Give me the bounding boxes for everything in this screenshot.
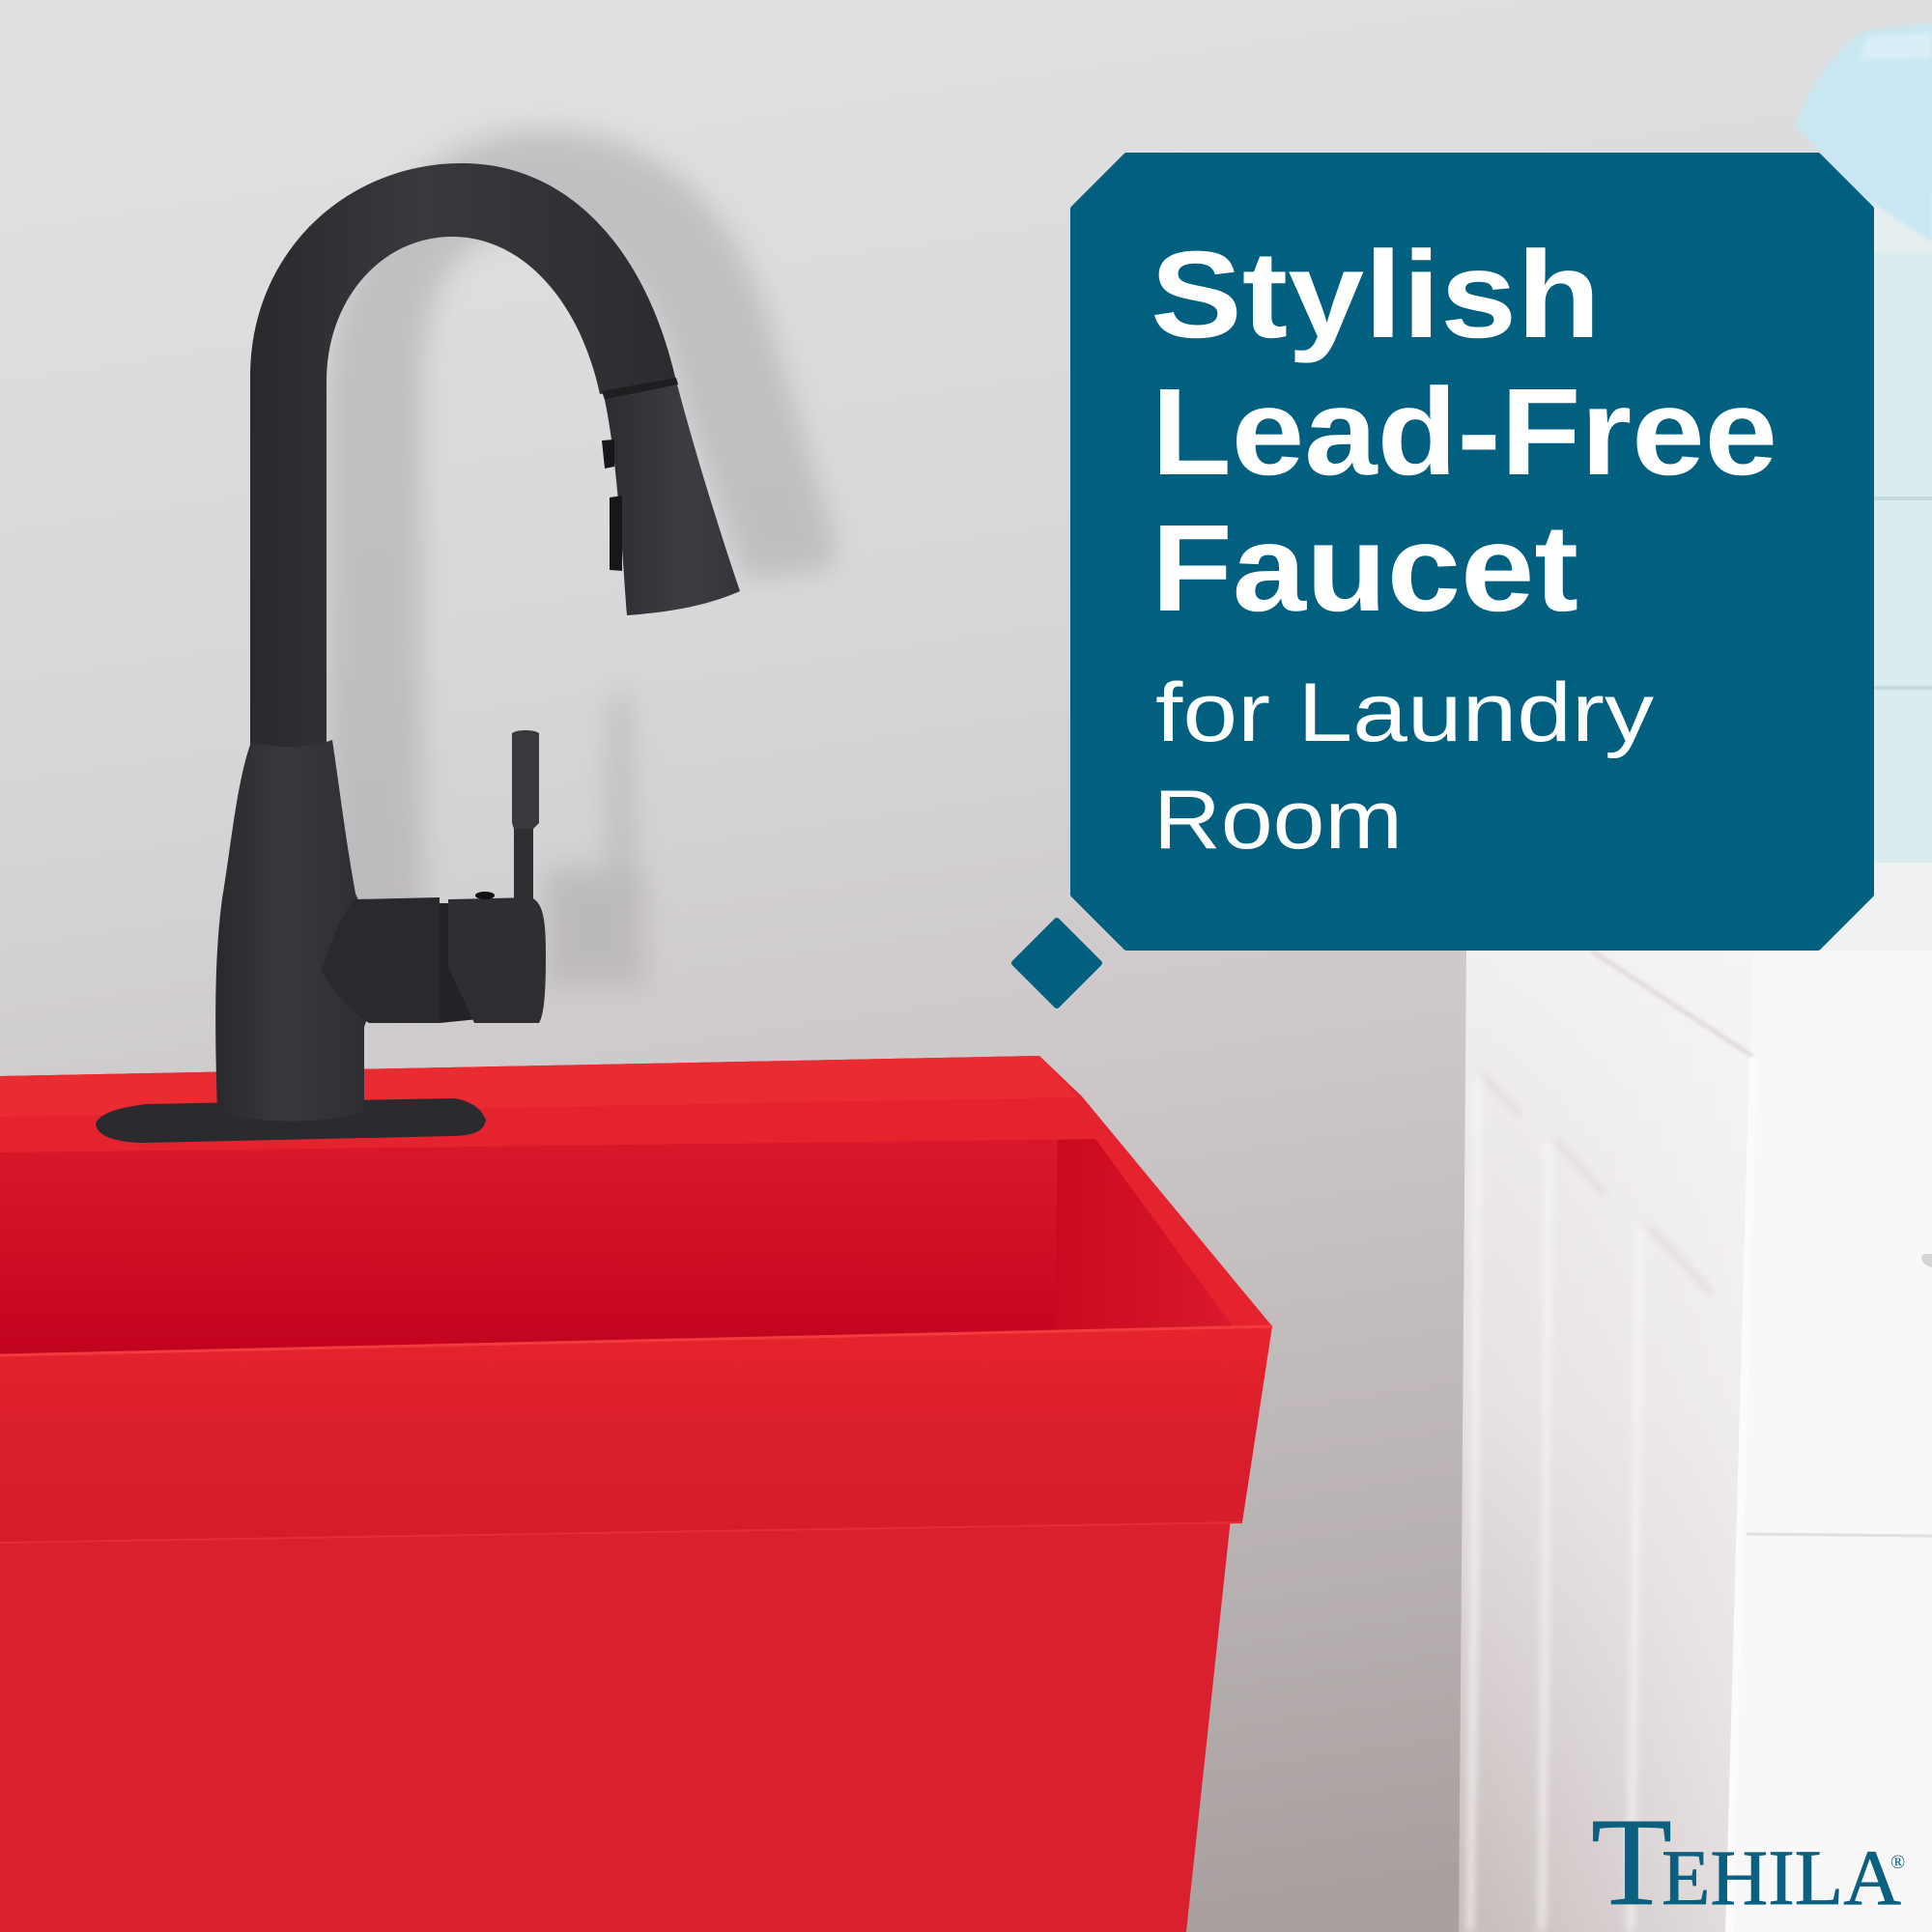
sink basin interior <box>0 1139 1234 1355</box>
pale area above towels <box>1855 193 1932 261</box>
callout panel <box>1014 156 1871 1006</box>
deck plate <box>96 1098 486 1143</box>
handle neck <box>322 897 440 1023</box>
faucet shadow on wall <box>327 130 836 1005</box>
sink deck <box>0 1056 1272 1355</box>
lever stem <box>514 821 533 898</box>
spout <box>250 163 676 749</box>
handle button <box>475 892 495 899</box>
sink front rim <box>0 1326 1272 1543</box>
headline text <box>1151 226 1777 638</box>
Tehila logo: ® <box>1890 1852 1905 1873</box>
faucet base body <box>215 740 386 1121</box>
deck raised ledge <box>0 1056 1078 1117</box>
headline text: Stylish <box>1151 226 1601 364</box>
spray head <box>605 384 740 615</box>
spray head ring <box>602 378 678 400</box>
headline text: Faucet <box>1151 499 1578 638</box>
stacked towels <box>1864 252 1932 863</box>
Tehila logo <box>1591 1793 1905 1932</box>
black faucet <box>96 163 740 1143</box>
handle hub <box>448 897 546 1023</box>
headline text: Lead-Free <box>1151 363 1777 501</box>
basin right inner wall <box>1055 1139 1234 1332</box>
washing machine <box>1459 863 1932 1932</box>
callout box <box>1073 156 1871 948</box>
sink body <box>0 1519 1231 1932</box>
handle collar <box>440 903 478 1023</box>
subheading text: Room <box>1153 774 1403 867</box>
red utility sink <box>0 1056 1272 1932</box>
Tehila logo: EHILA <box>1662 1833 1901 1921</box>
spray buttons <box>602 440 622 571</box>
lever grip <box>512 730 539 829</box>
callout pointer diamond <box>1014 921 1099 1006</box>
Tehila logo: T <box>1591 1793 1672 1932</box>
subheading text: for Laundry <box>1155 667 1654 759</box>
subheading text <box>1153 667 1654 867</box>
laundry bottle <box>1795 23 1932 242</box>
